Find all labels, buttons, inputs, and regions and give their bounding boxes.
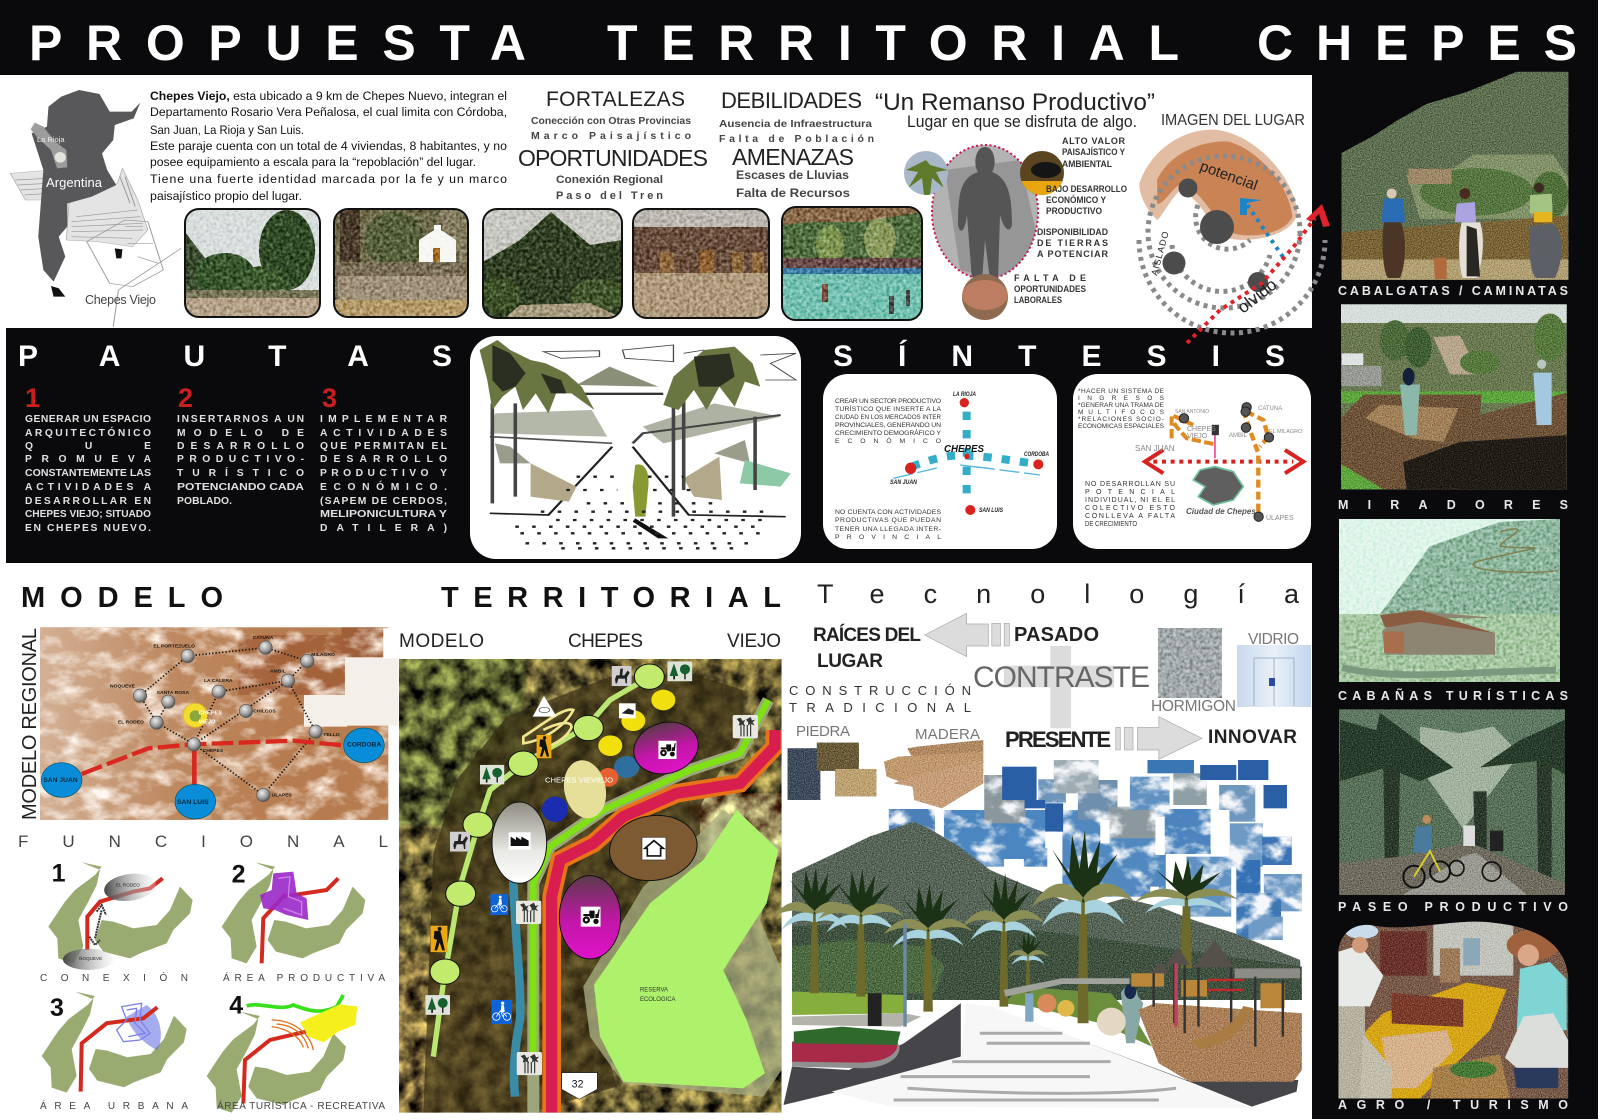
chart: regional map: TELLO — [323, 732, 340, 738]
SWOT: fortalezas: FORTALEZAS — [546, 88, 685, 111]
header band — [0, 0, 1577, 75]
text block: pauta 1: GENERAR UN ESPACIO — [25, 414, 151, 425]
label: potencial: potencial — [1198, 158, 1260, 194]
title: TERRITORIAL — [607, 15, 1179, 71]
diagram 1 conexion: ÑOQUEVE — [79, 955, 102, 961]
text block: description: Este paraje cuenta con un total de 4 viviendas, 8 habitantes, y no — [150, 139, 507, 153]
arrow: pasado — [925, 613, 1009, 657]
panel: Argentina location map — [10, 90, 181, 327]
photo: trees — [185, 209, 320, 318]
material: timber — [884, 740, 983, 808]
map labels: SAN ANTONIO — [1175, 409, 1209, 415]
label: disponibilidad — [1037, 227, 1108, 259]
label: area turistica: ÁREA TURÍSTICA - RECREATIVA — [217, 1099, 385, 1112]
text block: pauta 1: ACTIVIDADES A — [25, 482, 152, 493]
label: cabanas: CABAÑAS TURÍSTICAS — [1338, 688, 1568, 703]
photo: miradores — [1341, 304, 1567, 489]
text: potencial individual: POTENCIAL — [1085, 489, 1175, 496]
text block: pauta 1 — [25, 414, 152, 534]
text block: description — [150, 89, 507, 203]
map labels — [1135, 406, 1303, 522]
label: falta de oportunidades: LABORALES — [1014, 295, 1062, 305]
SWOT: debilidades: Ausencia de Infraestructura — [719, 118, 872, 130]
icon: factory — [509, 832, 531, 850]
label: Chepes Viejo: Chepes Viejo — [85, 293, 156, 307]
text block: pauta 2: PRODUCTIVO- — [177, 454, 305, 465]
photo: stone building — [633, 209, 769, 318]
label: San Luis node: SAN LUIS — [979, 507, 1004, 514]
icon: small camp — [619, 703, 636, 718]
panel: tecnologia materials: TRADICIONAL — [789, 700, 971, 715]
text: sistema de ingresos: INGRESOS — [1078, 395, 1165, 402]
chart: territorial model map: CHEPES VIEVIEJO — [545, 776, 613, 785]
icon: viewpoint — [533, 696, 557, 717]
text: potencial individual: CONLLEVA A FALTA — [1085, 513, 1175, 520]
map labels: CHEPES — [1187, 426, 1216, 433]
diagram 2 productiva: 2 — [232, 861, 246, 889]
SWOT: fortalezas: Conección con Otras Provincias — [531, 115, 691, 127]
diagram: imagen del lugar — [1139, 130, 1330, 343]
label: alto valor — [1062, 136, 1126, 169]
chart: regional map: CORDOBA — [347, 742, 382, 749]
heading: imagen del lugar: IMAGEN DEL LUGAR — [1161, 112, 1305, 129]
panel: tecnologia materials — [788, 613, 1311, 808]
panel: tecnologia materials: INNOVAR — [1208, 727, 1297, 748]
heading: pautas: PAUTAS — [18, 340, 452, 373]
text block: pauta 1: CHEPES VIEJO; SITUADO — [25, 509, 151, 520]
icons: cycling — [490, 894, 512, 1024]
flower bed — [792, 1027, 901, 1068]
text: sistema de ingresos — [1078, 388, 1165, 430]
diagram: human figure circle — [932, 145, 1040, 280]
label: La Rioja node: LA RIOJA — [953, 391, 976, 398]
label: paseo productivo: PASEO PRODUCTIVO — [1338, 900, 1568, 914]
text block: pauta 2: TURÍSTICO — [177, 466, 304, 479]
label: falta de oportunidades: OPORTUNIDADES — [1014, 284, 1086, 294]
mountains — [792, 822, 1302, 1000]
SWOT: amenazas: Escases de Lluvias — [736, 168, 849, 182]
text block: pauta 2: DESARROLLO — [177, 441, 304, 452]
SWOT: debilidades — [719, 88, 874, 145]
number 1: 1 — [25, 383, 40, 413]
label: bajo desarrollo: ECONÓMICO Y — [1046, 194, 1106, 205]
SWOT: amenazas: Falta de Recursos — [736, 186, 850, 200]
text block: pauta 1: CONSTANTEMENTE LAS — [25, 468, 151, 479]
collage: white gaps — [1004, 810, 1229, 893]
text: sector productivo — [835, 398, 941, 445]
panel: tecnologia materials: HORMIGON — [1151, 698, 1236, 715]
text block: pauta 2: POBLADO. — [177, 496, 232, 507]
text block: pauta 3: PRODUCTIVO Y — [320, 468, 447, 479]
photo: cabalgatas — [1342, 72, 1568, 280]
icon: highway 32 — [562, 1073, 597, 1099]
diagram 4 turistica: 4 — [229, 991, 243, 1019]
panel: tecnologia materials: MADERA — [915, 726, 980, 743]
heading: sintesis: SÍNTESIS — [833, 339, 1285, 373]
SWOT: oportunidades — [518, 145, 708, 202]
text block: description: Chepes Viejo, esta ubicado a 9 km de Chepes Nuevo, integran el — [150, 89, 507, 103]
diagram 3 urbana: 3 — [50, 994, 64, 1022]
photo: chapel — [334, 209, 470, 318]
text block: pauta 1: DESARROLLAR EN — [25, 496, 151, 507]
chart: regional map: SAN JUAN — [43, 777, 78, 784]
label: disponibilidad: A POTENCIAR — [1037, 249, 1108, 259]
text block: pauta 3: DATILERA) — [320, 523, 447, 534]
photo: paseo productivo — [1339, 709, 1565, 895]
text block: pauta 1: EN CHEPES NUEVO. — [25, 523, 151, 534]
label: area urbana: ÁREA URBANA — [40, 1099, 188, 1112]
SWOT: fortalezas: Marco Paisajístico — [531, 130, 691, 142]
text: sector productivo: CREAR UN SECTOR PRODUCTIVO — [835, 398, 941, 405]
chart: regional map: NOQUEVE — [110, 683, 136, 689]
ground and road — [783, 987, 1298, 1108]
diagram 1 conexion: EL RODEO — [116, 882, 140, 887]
text: potencial individual: NO DESARROLLAN SU — [1085, 481, 1175, 488]
label: disponibilidad: DISPONIBILIDAD — [1037, 227, 1108, 237]
chart: regional map: AMBIL — [270, 668, 286, 674]
number 2: 2 — [178, 383, 193, 413]
heading: modelo regional vertical: MODELO REGIONAL — [19, 628, 41, 820]
panel: tecnologia materials: RAÍCES DEL — [813, 624, 921, 646]
text block: pauta 3: ACTIVIDADES — [320, 428, 447, 439]
SWOT: oportunidades: Conexión Regional — [556, 174, 663, 186]
text: actividades productivas: PROVINCIAL — [835, 534, 941, 541]
text: sector productivo: PROVINCIALES, GENERANDO UN — [835, 422, 941, 429]
text: sector productivo: CIUDAD EN LOS MERCADOS INTER — [835, 414, 941, 421]
photo: agro turismo — [1338, 918, 1568, 1099]
slogan: “Un Remanso Productivo” — [875, 89, 1155, 116]
chart: regional map: EL RODEO — [118, 720, 144, 726]
chart: territorial model map: RESERVA — [640, 987, 668, 993]
label: bajo desarrollo: BAJO DESARROLLO — [1046, 184, 1127, 194]
diagram 3 urbana — [42, 992, 187, 1093]
label: Chepes node: CHEPES — [944, 443, 984, 455]
map labels: CATUNA — [1258, 406, 1282, 412]
icon: highway 32: 32 — [572, 1078, 584, 1090]
panel: tecnologia materials: LUGAR — [817, 651, 883, 672]
contrast cross — [1004, 646, 1114, 728]
map labels: AMBIL — [1229, 433, 1248, 439]
chart: regional map: CHILCOS — [253, 709, 276, 715]
panel: tecnologia materials: PRESENTE — [1005, 727, 1111, 752]
chart: regional map: CATUNA — [253, 635, 274, 641]
label: conexion: CONEXIÓN — [40, 971, 188, 984]
panel: tecnologia materials: PASADO — [1014, 624, 1099, 646]
text block: pauta 3: ECONÓMICO. — [320, 480, 447, 493]
text block: pauta 3 — [320, 414, 448, 534]
panel: tecnologia materials: CONTRASTE — [973, 661, 1150, 694]
collage: sky fragments — [889, 760, 1302, 940]
text block: pauta 3: DESARROLLO — [320, 454, 447, 465]
heading: funcional: FUNCIONAL — [18, 832, 388, 851]
subheading: modelo chepes viejo: MODELO — [399, 631, 484, 652]
SWOT: oportunidades: Paso del Tren — [556, 190, 663, 202]
label: alto valor: PAISAJÍSTICO Y — [1062, 147, 1125, 157]
text: actividades productivas — [835, 509, 941, 541]
text block: description: Departamento Rosario Vera Peñalosa, el cual limita con Córdoba, — [150, 105, 507, 119]
label: La Rioja: La Rioja — [37, 135, 65, 144]
photo: cabanas — [1339, 519, 1560, 682]
text block: pauta 3: (SAPEM DE CERDOS, — [320, 496, 447, 507]
title: PROPUESTA — [29, 15, 526, 71]
SWOT: debilidades: DEBILIDADES — [721, 88, 862, 113]
SWOT: debilidades: Falta de Población — [719, 133, 874, 145]
panel: tecnologia materials: PIEDRA — [796, 723, 850, 740]
label: cabalgatas: CABALGATAS / CAMINATAS — [1338, 284, 1568, 298]
heading: territorial: TERRITORIAL — [441, 582, 781, 614]
text block: description: San Juan, La Rioja y San Luis. — [150, 123, 304, 137]
label: agro turismo: AGRO / TURISMO — [1338, 1098, 1568, 1112]
chart: regional map — [40, 627, 398, 820]
map labels: ULAPES — [1266, 515, 1294, 522]
right black column — [1312, 0, 1598, 1119]
diagram 4 turistica — [207, 991, 355, 1113]
label: area productiva: ÁREA PRODUCTIVA — [223, 971, 385, 984]
chart: regional map: VIEJO — [199, 720, 216, 726]
photo: swimming pool — [782, 207, 922, 320]
collage: urban scene — [773, 822, 1302, 1108]
icons: palm groves — [516, 715, 758, 1075]
slogan — [875, 89, 1155, 131]
text: potencial individual: INDIVIDUAL, NI EL EL — [1085, 497, 1175, 504]
text: sistema de ingresos: MULTIFOCOS — [1078, 409, 1165, 416]
label: bajo desarrollo — [1046, 184, 1127, 216]
diagram 1 conexion: 1 — [52, 860, 66, 888]
chart: regional map: CHEPES — [199, 711, 222, 717]
text: sector productivo: ECONÓMICO — [835, 436, 941, 445]
diagram 1 conexion — [48, 860, 193, 970]
label: aislado: AISLADO — [1149, 229, 1171, 277]
text: sector productivo: CRECIMIENTO DEMOGRÁFICO Y — [835, 428, 941, 437]
text block: pauta 1: ARQUITECTÓNICO — [25, 426, 151, 439]
icons: hikers — [431, 735, 551, 952]
panel: sintesis regional — [823, 374, 1057, 549]
chart: regional map: MILAGRO — [311, 652, 335, 658]
heading: tecnologia: Tecnología — [817, 579, 1300, 609]
icons: horse trail — [450, 666, 632, 852]
label: bajo desarrollo: PRODUCTIVO — [1046, 206, 1102, 216]
text: sistema de ingresos: ECONOMICAS ESPACIALES — [1078, 423, 1165, 430]
chart: regional map: ULAPES — [272, 793, 293, 799]
text block: pauta 2 — [177, 414, 305, 507]
chart: regional map: SANTA ROSA — [157, 690, 189, 696]
chart: regional map: EL PORTEZUELO — [153, 644, 195, 650]
label: falta de oportunidades — [1014, 273, 1086, 305]
slogan: Lugar en que se disfruta de algo. — [907, 112, 1137, 131]
chart: regional map: CHEPES — [203, 748, 224, 754]
icons: tractors — [581, 741, 677, 927]
text block: description: paisajístico propio del lugar. — [150, 189, 302, 203]
SWOT: amenazas: AMENAZAS — [732, 144, 854, 170]
label: Cordoba node: CORDOBA — [1024, 451, 1049, 458]
label: falta de oportunidades: FALTA DE — [1014, 273, 1086, 283]
text: sistema de ingresos: *HACER UN SISTEMA DE — [1078, 388, 1165, 395]
label: alto valor: AMBIENTAL — [1062, 159, 1112, 169]
SWOT: fortalezas — [531, 88, 691, 142]
text block: description: posee equipamiento a escala para la “repoblación” del lugar. — [150, 155, 476, 169]
label: Argentina: Argentina — [46, 175, 103, 190]
text block: pauta 3: MELIPONICULTURA Y — [320, 509, 447, 520]
material: glass — [1237, 645, 1311, 707]
label: ciudad de chepes: Ciudad de Chepes — [1186, 507, 1256, 516]
icon: palm photo — [904, 151, 948, 195]
text block: pauta 1: PROMUEVA — [25, 454, 152, 465]
subheading: modelo chepes viejo: VIEJO — [727, 631, 781, 652]
text: potencial individual: DE CRECIMIENTO — [1085, 521, 1137, 528]
icons: forest — [425, 661, 692, 1015]
subheading: modelo chepes viejo — [399, 631, 781, 652]
panel: sintesis local — [1073, 374, 1311, 549]
icon: house — [642, 837, 666, 860]
chart: territorial model map: ECOLOGICA — [640, 997, 676, 1003]
text: actividades productivas: PRODUCTIVAS QUE PUEDAN — [835, 517, 941, 524]
panel: pautas band — [6, 328, 1312, 563]
panel: perspective sketch — [470, 336, 801, 559]
chart: regional map: SAN LUIS — [177, 799, 209, 806]
palm trees — [773, 830, 1238, 1023]
text: sistema de ingresos: *RELACIONES SOCIO- — [1078, 416, 1164, 423]
arrow: blue potential — [1240, 198, 1283, 257]
label: miradores: MIRADORES — [1338, 498, 1568, 512]
label: olvido: olvido — [1234, 275, 1280, 317]
text: sistema de ingresos: *GENERAR UNA TRAMA DE — [1078, 402, 1165, 409]
label: disponibilidad: DE TIERRAS — [1037, 238, 1108, 248]
icon: pig photo — [962, 274, 1008, 320]
number 3: 3 — [322, 383, 337, 413]
arrow: red route — [1187, 204, 1330, 343]
material: stone — [788, 743, 876, 800]
chart: regional map: LA CALERA — [204, 678, 233, 684]
text: actividades productivas: TENER UNA LLEGADA INTER- — [835, 526, 941, 533]
heading: modelo: MODELO — [21, 582, 223, 614]
photo: mountain — [480, 209, 630, 318]
label: alto valor: ALTO VALOR — [1062, 136, 1126, 146]
text: potencial individual: COLECTIVO ESTO — [1085, 505, 1176, 512]
text block: pauta 2: INSERTARNOS A UN — [177, 414, 304, 425]
playground — [1138, 1003, 1302, 1082]
map labels: SAN JUAN — [1135, 444, 1175, 453]
arrow: presente — [1116, 717, 1202, 759]
chart: territorial model map — [399, 659, 782, 1113]
text block: pauta 3: IMPLEMENTAR — [320, 414, 448, 425]
icon: bee photo — [1020, 151, 1064, 195]
panel: tecnologia materials: VIDRIO — [1248, 631, 1299, 648]
panel: tecnologia materials: CONSTRUCCIÓN — [789, 683, 971, 698]
text block: pauta 2: POTENCIANDO CADA — [177, 482, 305, 493]
diagram 2 productiva — [222, 861, 365, 963]
SWOT: oportunidades: OPORTUNIDADES — [518, 145, 708, 171]
text block: pauta 1: QUE — [25, 441, 151, 452]
title: CHEPES — [1257, 15, 1577, 71]
street lamp and people — [868, 923, 1143, 1043]
subheading: modelo chepes viejo: CHEPES — [568, 631, 643, 652]
map labels: EL MILAGRO — [1269, 429, 1303, 435]
text block: pauta 3: QUE PERMITAN EL — [320, 441, 447, 452]
text block: description: Tiene una fuerte identidad marcada por la fe y un marco — [150, 172, 507, 186]
chart: funcional diagrams — [42, 860, 365, 1113]
text: potencial individual — [1085, 481, 1176, 528]
text block: pauta 2: MODELO DE — [177, 428, 304, 439]
material: concrete — [1158, 628, 1222, 698]
label: San Juan node: SAN JUAN — [890, 479, 917, 486]
map labels: VIEJO — [1187, 433, 1208, 440]
text: sector productivo: TURÍSTICO QUE INSERTE A LA — [835, 404, 941, 413]
SWOT: amenazas — [732, 144, 854, 200]
text: actividades productivas: NO CUENTA CON ACTIVIDADES — [835, 509, 941, 516]
